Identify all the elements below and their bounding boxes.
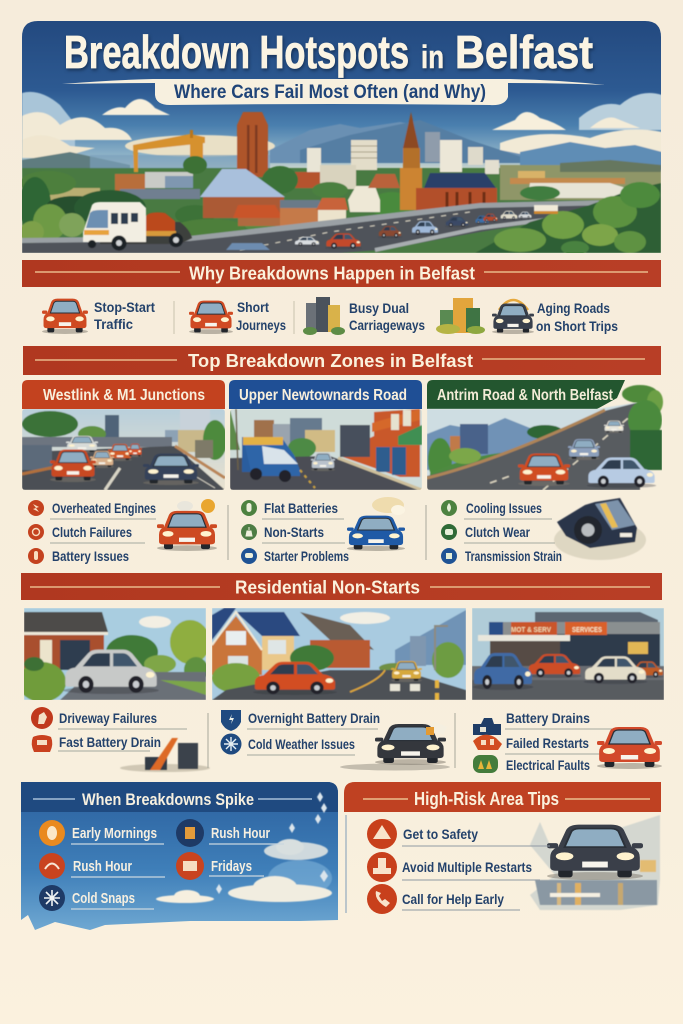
panel: driveway failures bbox=[18, 608, 210, 772]
list: Failed Restarts bbox=[506, 735, 589, 751]
road bbox=[22, 206, 586, 253]
stop-start traffic item: Traffic bbox=[94, 316, 133, 332]
zone header bbox=[427, 380, 625, 409]
green trees mid bbox=[22, 178, 74, 196]
aging roads item: Aging Roads bbox=[537, 300, 610, 316]
zone item list: Transmission Strain bbox=[465, 548, 562, 564]
short journeys item: Short bbox=[237, 299, 269, 315]
rush hour item bbox=[39, 853, 165, 879]
zone header bbox=[229, 380, 422, 409]
stop-start traffic item: Stop-Start bbox=[94, 299, 155, 315]
panel: Upper Newtownards Road bbox=[229, 380, 422, 564]
zone blue car with clouds bbox=[347, 497, 405, 551]
list: Cold Weather Issues bbox=[248, 736, 355, 752]
church bbox=[403, 112, 419, 148]
banner: why breakdowns happen: Why Breakdowns Happen in Belfast bbox=[189, 264, 475, 284]
aging roads item bbox=[492, 300, 618, 334]
short journeys item bbox=[189, 299, 286, 334]
banner: top breakdown zones bbox=[23, 346, 661, 375]
hero landscape illustration bbox=[19, 92, 662, 255]
zone item list: Flat Batteries bbox=[264, 500, 338, 516]
zone header bbox=[22, 380, 225, 409]
panel header bbox=[344, 782, 661, 812]
scene: retail car park: MOT & SERV bbox=[511, 627, 551, 634]
aging roads item: on Short Trips bbox=[536, 318, 618, 334]
hero traffic bbox=[226, 205, 558, 250]
zone item list: Clutch Failures bbox=[52, 524, 132, 540]
scene: suburban street bbox=[212, 608, 466, 700]
zone item list: Clutch Wear bbox=[465, 524, 530, 540]
scene: house driveway bbox=[18, 608, 210, 702]
high-rise icon bbox=[436, 298, 485, 334]
zone item list: Cooling Issues bbox=[466, 500, 542, 516]
zone item list bbox=[241, 500, 349, 564]
busy dual carriageways item bbox=[303, 297, 425, 335]
zone header: Antrim Road & North Belfast bbox=[437, 387, 613, 404]
zone item list bbox=[28, 500, 156, 564]
list: Overnight Battery Drain bbox=[248, 710, 380, 726]
panel background bbox=[21, 782, 338, 930]
early mornings item bbox=[39, 820, 164, 846]
panel: Westlink and M1 junctions bbox=[22, 380, 227, 564]
reasons row bbox=[42, 297, 618, 335]
short journeys item: Journeys bbox=[236, 317, 286, 333]
panel: Antrim Road and North Belfast bbox=[427, 380, 663, 564]
panel header: High-Risk Area Tips bbox=[414, 789, 559, 809]
subtitle ribbon bbox=[62, 79, 605, 105]
list: Fast Battery Drain bbox=[59, 734, 161, 750]
banner: residential non-starts: Residential Non-Starts bbox=[235, 578, 420, 598]
city blocks bbox=[307, 148, 321, 172]
zone scene: hillside road bbox=[427, 400, 662, 490]
banner: residential non-starts bbox=[21, 573, 662, 600]
scene behind car bbox=[530, 815, 660, 910]
list: Battery Drains bbox=[506, 710, 590, 726]
panel: overnight battery drain bbox=[212, 608, 466, 770]
rush hour item right bbox=[176, 819, 284, 847]
busy dual carriageways item: Busy Dual bbox=[349, 300, 409, 316]
crane bbox=[133, 134, 205, 172]
battery icon bbox=[120, 738, 210, 772]
panel header: When Breakdowns Spike bbox=[82, 790, 254, 809]
zone header: Upper Newtownards Road bbox=[239, 387, 407, 404]
panel: battery drains bbox=[472, 608, 664, 773]
zone item list: Battery Issues bbox=[52, 548, 129, 564]
clouds and snowflakes bbox=[156, 792, 332, 903]
title: in bbox=[421, 39, 444, 75]
treetops beside header bbox=[622, 385, 663, 414]
list: Electrical Faults bbox=[506, 757, 590, 773]
hero panel bbox=[19, 21, 662, 255]
banner: why breakdowns happen bbox=[22, 260, 661, 287]
zone item list: Non-Starts bbox=[264, 524, 324, 540]
list bbox=[220, 710, 380, 755]
call for help item: Call for Help Early bbox=[402, 891, 504, 907]
dark car with warning bbox=[340, 721, 450, 770]
subtitle ribbon: Where Cars Fail Most Often (and Why) bbox=[174, 82, 486, 103]
zone car with sun icon bbox=[157, 499, 217, 551]
busy dual carriageways item: Carriageways bbox=[349, 317, 425, 333]
zone header: Westlink & M1 Junctions bbox=[43, 387, 205, 404]
fridays item: Fridays bbox=[211, 859, 252, 875]
rush hour item right: Rush Hour bbox=[211, 826, 270, 842]
Titanic building bbox=[200, 169, 285, 197]
zone scene: motorway traffic bbox=[22, 408, 227, 490]
right trees bbox=[475, 183, 661, 253]
recovery truck bbox=[83, 202, 192, 250]
zone item list bbox=[441, 500, 562, 564]
tower bbox=[237, 112, 268, 177]
zone item list: Overheated Engines bbox=[52, 500, 156, 516]
scene: retail car park: SERVICES bbox=[572, 627, 602, 634]
cold snaps item bbox=[39, 885, 154, 911]
get to safety item bbox=[367, 819, 550, 849]
zone broken-down car bbox=[554, 498, 646, 560]
panel: high-risk area tips bbox=[344, 782, 661, 914]
title: Breakdown Hotspots bbox=[64, 26, 409, 78]
zone item list: Starter Problems bbox=[264, 548, 349, 564]
red car bbox=[597, 727, 662, 769]
panel header bbox=[21, 782, 338, 812]
banner: top breakdown zones: Top Breakdown Zones in Belfast bbox=[188, 351, 473, 371]
scene: retail car park bbox=[472, 608, 664, 700]
rush hour item: Rush Hour bbox=[73, 859, 132, 875]
dark SUV bbox=[547, 825, 643, 880]
avoid multiple restarts item bbox=[367, 852, 540, 882]
list bbox=[473, 710, 622, 773]
hero sky bbox=[22, 21, 661, 253]
stop-start traffic item bbox=[42, 299, 155, 334]
panel: when breakdowns spike bbox=[21, 782, 338, 930]
zone scene: shopping street bbox=[230, 409, 422, 490]
avoid multiple restarts item: Avoid Multiple Restarts bbox=[402, 859, 532, 875]
call for help item bbox=[367, 884, 520, 914]
list bbox=[31, 707, 187, 752]
cold snaps item: Cold Snaps bbox=[72, 891, 135, 907]
list: Driveway Failures bbox=[59, 710, 157, 726]
early mornings item: Early Mornings bbox=[72, 826, 157, 842]
get to safety item: Get to Safety bbox=[403, 826, 478, 842]
fridays item bbox=[176, 852, 264, 880]
title: Belfast bbox=[455, 26, 593, 78]
